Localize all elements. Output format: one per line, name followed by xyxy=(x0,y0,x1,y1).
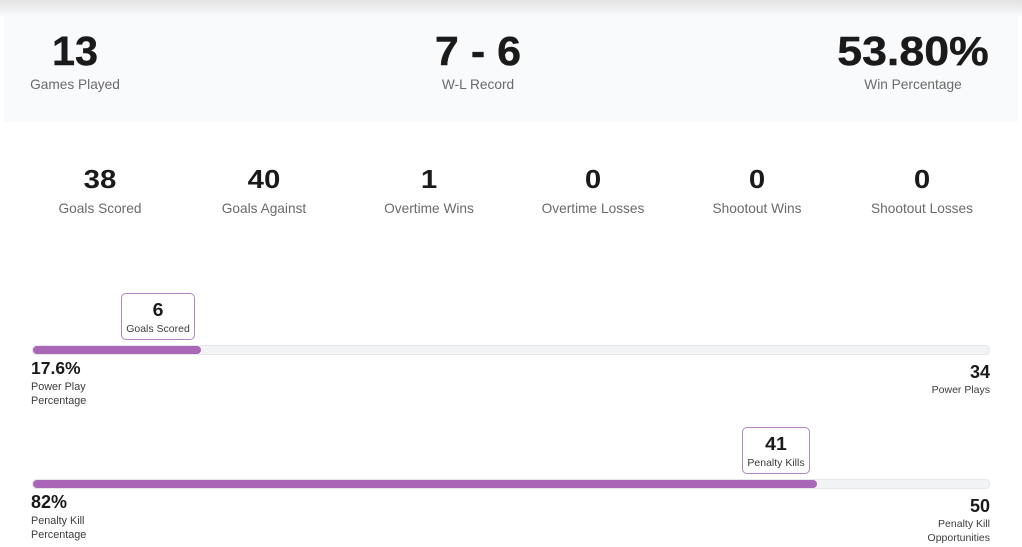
stat: overtime losses xyxy=(542,164,644,216)
power play percentage: Percentage xyxy=(31,395,86,407)
callout: goals scored: 6 xyxy=(153,300,163,320)
stat: goals scored: Goals Scored xyxy=(59,201,141,216)
power play bar fill xyxy=(33,346,201,354)
stat: goals against: 40 xyxy=(248,164,280,194)
stat: W-L record: W-L Record xyxy=(442,77,514,92)
penalty kill opportunities: 50 xyxy=(970,496,990,516)
power plays count: 34 xyxy=(970,362,990,382)
stat: overtime losses: 0 xyxy=(585,164,601,194)
callout: penalty kills xyxy=(742,427,810,474)
stat: shootout losses: 0 xyxy=(914,164,930,194)
stat: W-L record: 7 - 6 xyxy=(435,28,521,74)
callout: goals scored xyxy=(121,293,195,340)
stat: goals against xyxy=(222,164,306,216)
penalty kill opportunities: Opportunities xyxy=(928,532,990,544)
callout: penalty kills: Penalty Kills xyxy=(747,457,805,469)
callout: penalty kills: 41 xyxy=(765,434,787,454)
penalty kill opportunities xyxy=(928,496,990,544)
stat: goals against: Goals Against xyxy=(222,201,306,216)
penalty kill bar fill xyxy=(33,480,817,488)
power plays count xyxy=(932,362,990,396)
stat: shootout wins: Shootout Wins xyxy=(712,201,802,216)
power play percentage: Power Play xyxy=(31,381,86,393)
top summary panel xyxy=(4,0,1018,122)
penalty kill percentage: Penalty Kill xyxy=(31,515,84,527)
stat: win percentage: Win Percentage xyxy=(864,77,962,92)
stat: overtime wins xyxy=(384,164,474,216)
stat: win percentage: 53.80% xyxy=(837,28,989,74)
power play percentage xyxy=(31,358,86,407)
stat: games played: 13 xyxy=(52,28,98,74)
power play bar track xyxy=(32,345,990,355)
stat: shootout wins xyxy=(712,164,802,216)
stat: shootout losses: Shootout Losses xyxy=(871,201,973,216)
stat: goals scored xyxy=(59,164,141,216)
penalty kill bar track xyxy=(32,479,990,489)
stat: shootout wins: 0 xyxy=(749,164,765,194)
stat: overtime losses: Overtime Losses xyxy=(542,201,644,216)
stat: goals scored: 38 xyxy=(84,164,116,194)
penalty kill percentage xyxy=(31,492,86,541)
stat: overtime wins: 1 xyxy=(421,164,437,194)
stat: overtime wins: Overtime Wins xyxy=(384,201,474,216)
top shadow xyxy=(0,0,1022,16)
callout: goals scored: Goals Scored xyxy=(126,323,190,335)
penalty kill percentage: Percentage xyxy=(31,529,86,541)
stat: shootout losses xyxy=(871,164,973,216)
power plays count: Power Plays xyxy=(932,384,990,396)
stat: games played: Games Played xyxy=(30,77,120,92)
power play percentage: 17.6% xyxy=(31,358,81,378)
penalty kill percentage: 82% xyxy=(31,492,67,512)
stat: games played xyxy=(30,28,120,92)
penalty kill opportunities: Penalty Kill xyxy=(938,518,990,530)
